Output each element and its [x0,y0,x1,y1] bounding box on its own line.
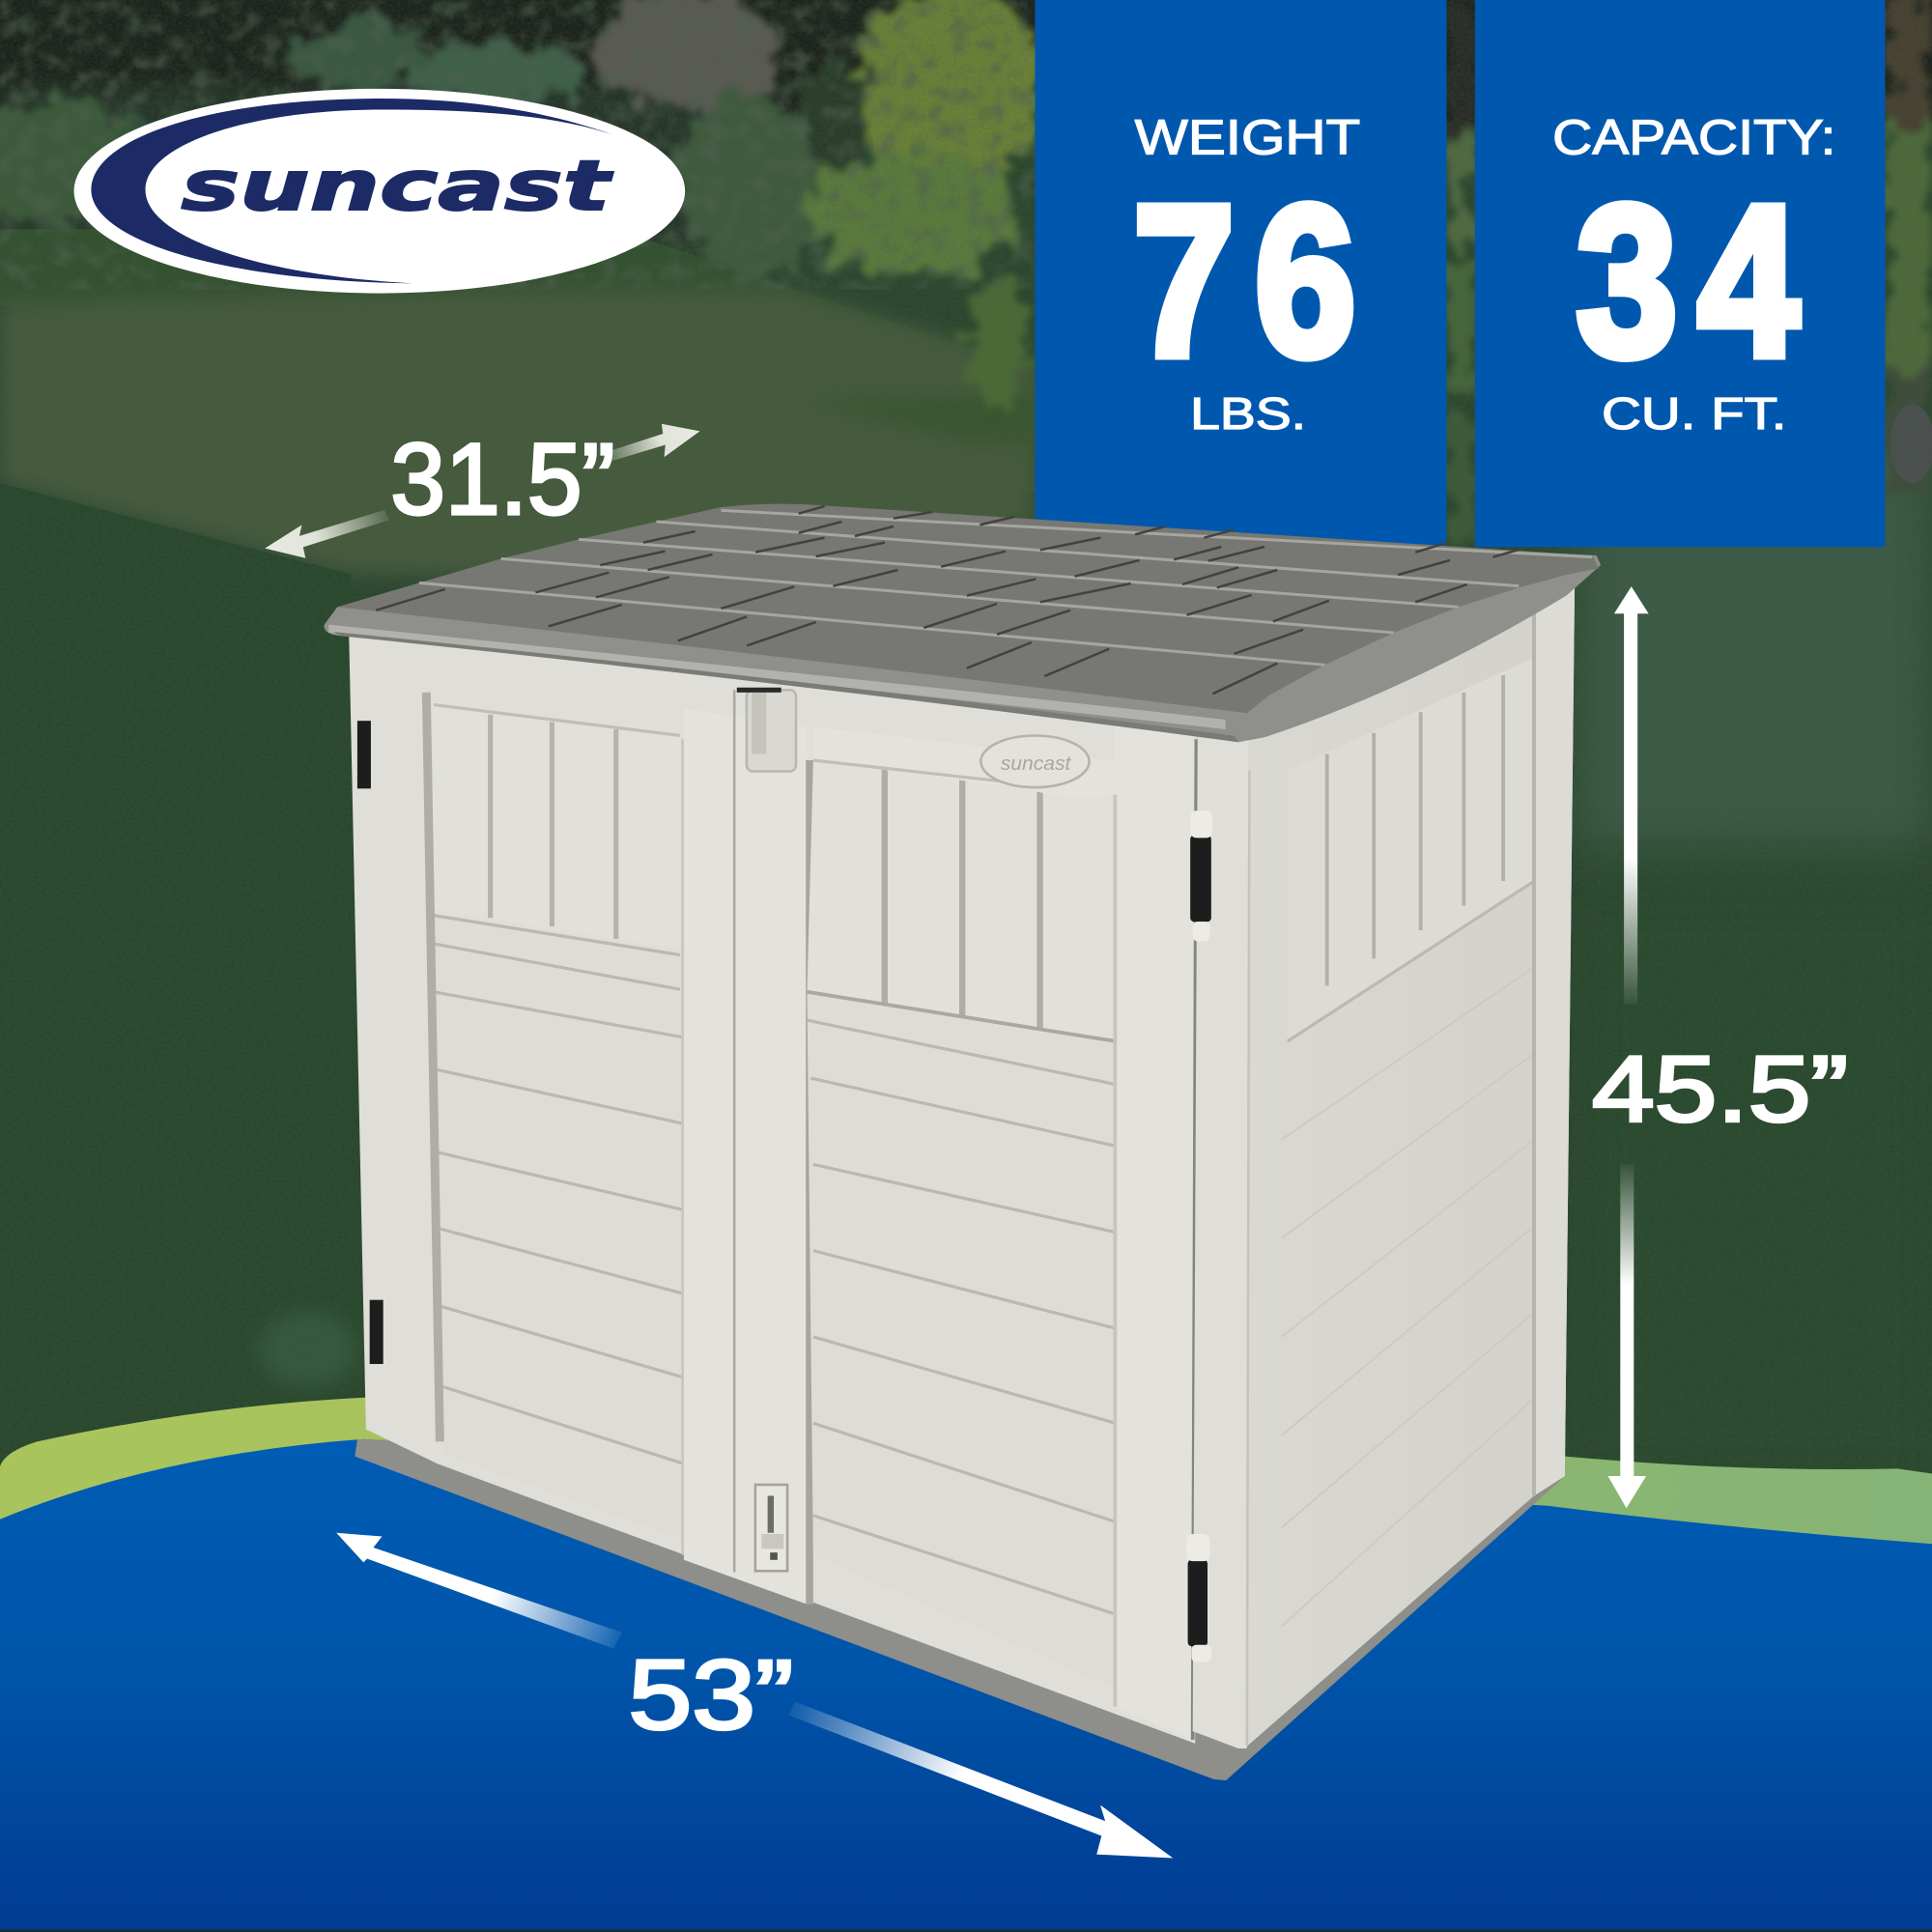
arrow: height top [1614,586,1649,1005]
arrow: width left [336,1533,622,1649]
latch [755,1485,787,1571]
shed [325,504,1601,1780]
left door lower panel [426,693,685,1540]
shed roof [325,504,1601,742]
hasp [747,690,796,771]
hinge: right upper [1190,810,1212,941]
panel: capacity [1475,0,1886,547]
roof top surface [337,504,1599,713]
embossed logo on door [813,727,1115,797]
shed base [355,1439,1562,1780]
label: height: 45.5” [1592,1037,1848,1142]
arrow: depth left [265,510,389,558]
label: depth: 31.5” [390,423,614,536]
capacity unit: CU. FT. [1602,388,1786,439]
capacity heading: CAPACITY: [1552,109,1836,164]
center stile and latch [683,688,810,1605]
hinge: right lower [1186,1534,1211,1662]
roof tile lines [376,506,1592,694]
arrow: depth right [610,424,699,461]
roof lip [325,507,1601,742]
hinge: left lower [370,1300,384,1364]
arrow: height bottom [1608,1164,1646,1508]
weight value: 76 [1133,161,1356,401]
green ground band [0,1397,1932,1565]
panel: weight [1035,0,1446,549]
logo: suncast: suncast [182,146,613,226]
right door lower panel [807,708,1193,1740]
weight unit: LBS. [1190,388,1306,439]
hinge: left upper [357,721,371,788]
shed right side [1244,585,1575,1748]
shed front face [349,622,1198,1744]
blue ground [0,1439,1932,1932]
right door upper panel [807,760,1115,1041]
weight heading: WEIGHT [1135,109,1360,164]
shed corner post [1186,727,1249,1748]
logo: suncast [74,89,685,294]
arrow: width right [788,1701,1173,1858]
embossed logo on door: suncast [1001,753,1072,775]
capacity value: 34 [1577,161,1799,401]
label: width: 53” [629,1640,793,1750]
foliage [0,0,1932,549]
left door upper panel [431,705,680,949]
